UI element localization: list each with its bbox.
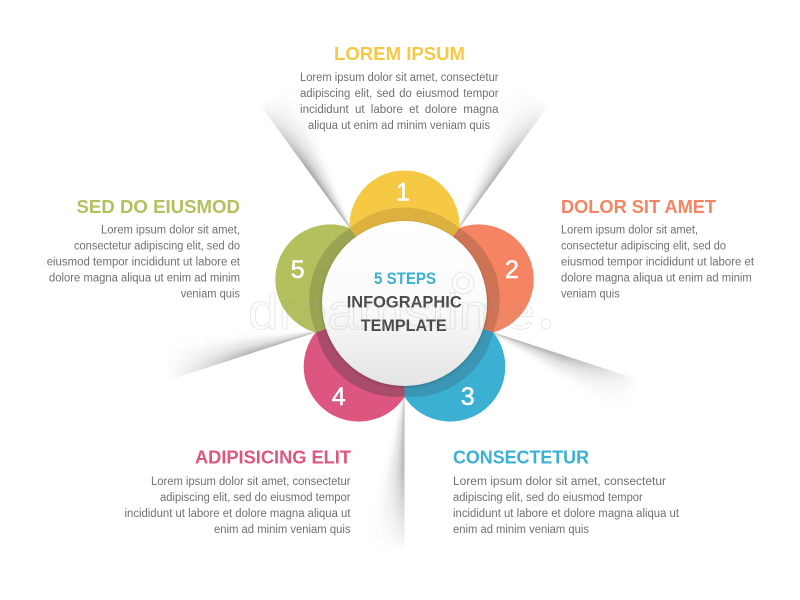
number 2: 2 [505, 256, 519, 284]
body: right: veniam quis [561, 288, 620, 300]
body: lower right: Lorem ipsum dolor sit amet, consectetur [453, 476, 666, 488]
body: top: adipiscing elit, sed do eiusmod tempor [300, 88, 499, 100]
petal 5: green [275, 224, 356, 332]
center title: TEMPLATE [361, 316, 447, 335]
petal 3: blue [404, 329, 506, 422]
body: lower right: incididunt ut labore et dolore magna aliqua ut [453, 508, 680, 520]
body: top: incididunt ut labore et dolore magna [300, 104, 499, 116]
fold shadow: lower left [176, 331, 316, 377]
heading: consectetur: CONSECTETUR [453, 448, 589, 468]
body: lower right [453, 476, 680, 536]
body: lower left: Lorem ipsum dolor sit amet, consectetur [151, 476, 351, 488]
fold shadow: upper right [459, 108, 544, 228]
center title: 5 STEPS [374, 269, 436, 288]
text block: lower right [453, 448, 680, 536]
body: right: eiusmod tempor incididunt ut labore et [561, 256, 755, 268]
body: lower right: adipiscing elit, sed do eiusmod tempor [453, 492, 643, 504]
body: right: Lorem ipsum dolor sit amet, [561, 224, 698, 236]
text block: top [300, 44, 499, 132]
body: left: consectetur adipiscing elit, sed do [74, 240, 240, 252]
body: left [47, 224, 241, 300]
center circle [322, 221, 487, 386]
number 1: 1 [396, 178, 410, 206]
body: top [300, 72, 499, 132]
number 3: 3 [461, 383, 475, 411]
fold shadow: upper left [264, 107, 350, 228]
body: right: dolore magna aliqua ut enim ad minim [561, 272, 752, 284]
petal 1: yellow [350, 170, 460, 237]
body: lower left: enim ad minim veniam quis [214, 524, 351, 536]
body: left: Lorem ipsum dolor sit amet, [101, 224, 240, 236]
body: lower left: incididunt ut labore et dolore magna aliqua ut [124, 508, 351, 520]
petal 4: pink [304, 329, 404, 422]
body: left: dolore magna aliqua ut enim ad minim [49, 272, 240, 284]
body: right [561, 224, 755, 300]
fold shadow: lower right [493, 332, 632, 390]
text block: lower left [124, 448, 351, 536]
body: lower left [124, 476, 351, 536]
number 5: 5 [291, 256, 305, 284]
text block: right [561, 197, 755, 300]
fold shadow: bottom [384, 397, 404, 543]
body: lower right: enim ad minim veniam quis [453, 524, 589, 536]
number 4: 4 [332, 383, 346, 411]
heading: adipisicing elit: ADIPISICING ELIT [195, 448, 351, 468]
petal 2: orange [453, 224, 534, 332]
body: top: Lorem ipsum dolor sit amet, consectetur [300, 72, 499, 84]
body: left: veniam quis [181, 288, 240, 300]
body: left: eiusmod tempor incididunt ut labore et [47, 256, 241, 268]
text block: left [47, 197, 241, 300]
center title: INFOGRAPHIC [347, 293, 462, 312]
heading: lorem ipsum: LOREM IPSUM [334, 44, 465, 64]
body: lower left: adipiscing elit, sed do eiusmod tempor [160, 492, 351, 504]
center title [347, 269, 462, 335]
heading: sed do eiusmod: SED DO EIUSMOD [76, 197, 240, 217]
watermark: dreamstime [248, 284, 535, 340]
body: right: consectetur adipiscing elit, sed do [561, 240, 726, 252]
heading: dolor sit amet: DOLOR SIT AMET [561, 197, 716, 217]
body: top: aliqua ut enim ad minim veniam quis [308, 120, 490, 132]
